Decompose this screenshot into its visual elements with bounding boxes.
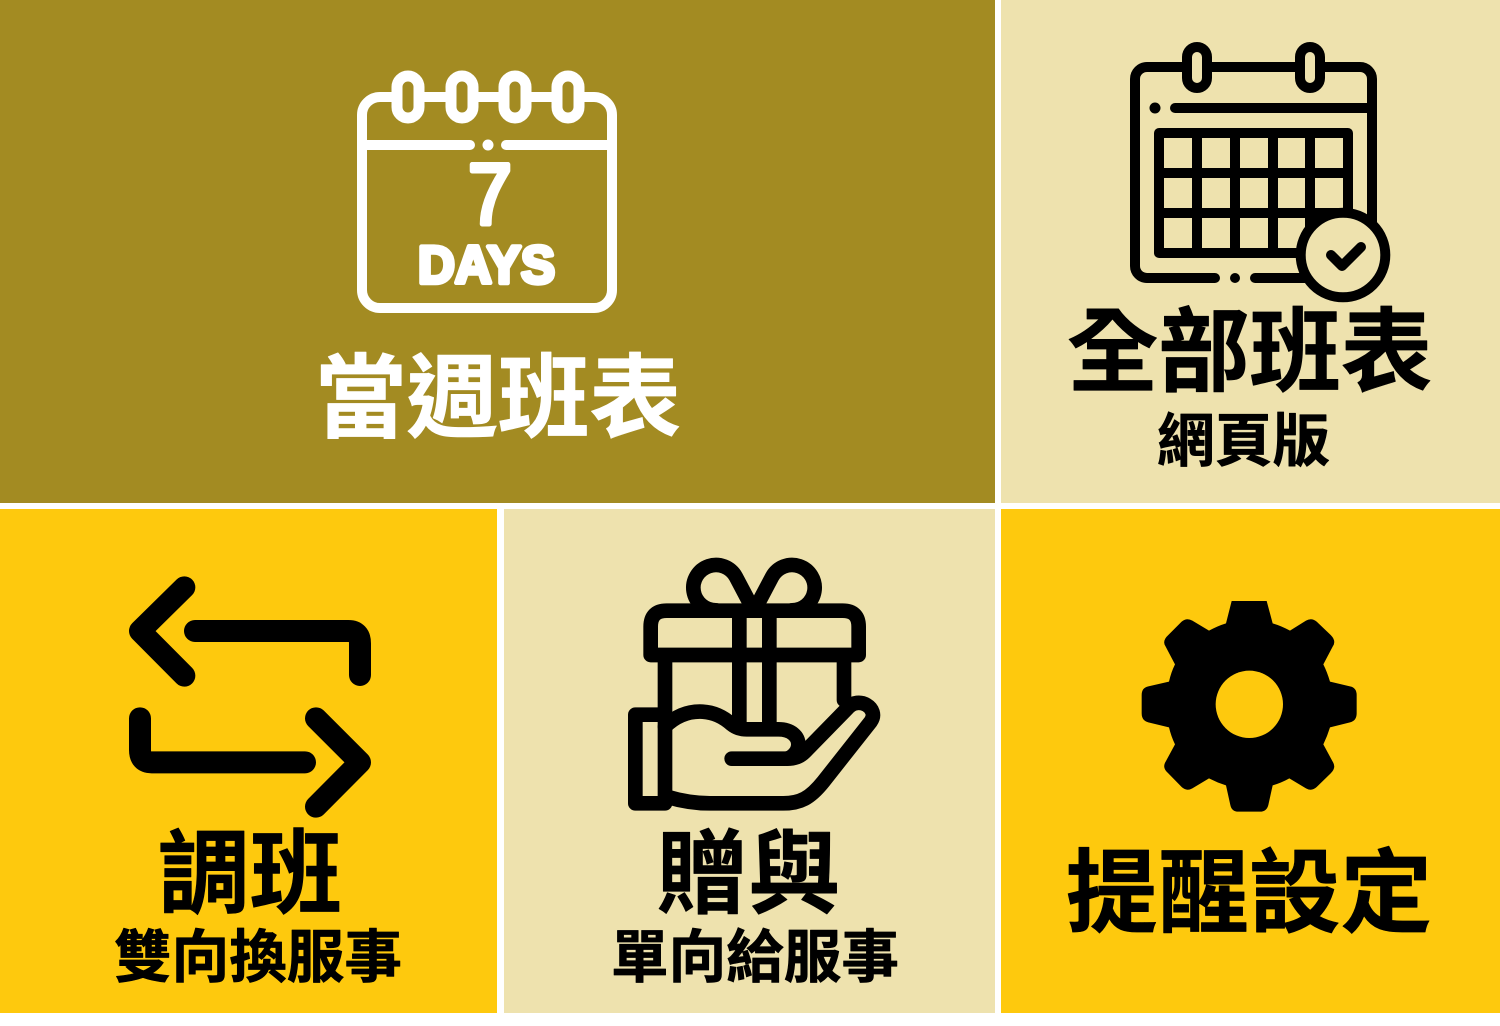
panel: give shift (504, 509, 995, 1013)
heading: reminder settings: 提醒設定 (1066, 843, 1432, 945)
icon: calendar with check (1135, 47, 1385, 297)
icon: 7 days calendar: DAYS (418, 236, 555, 295)
icon: gift on hand (635, 565, 873, 803)
heading: full schedule: 全部班表 (1067, 302, 1432, 404)
heading: swap shift: 調班 (158, 824, 342, 926)
subheading: web version: 網頁版 (1157, 410, 1330, 474)
panel: swap shift (0, 509, 497, 1013)
subheading: two-way swap service: 雙向換服事 (114, 926, 402, 990)
icon: gear (1142, 601, 1357, 812)
panel: weekly schedule (0, 0, 995, 503)
icon: 7 days calendar (362, 76, 612, 308)
panel: reminder settings (1001, 509, 1500, 1013)
heading: weekly schedule: 當週班表 (315, 348, 681, 450)
icon: two-way arrows (140, 587, 360, 807)
icon: 7 days calendar: 7 (468, 147, 512, 243)
panel: full schedule (1001, 0, 1500, 503)
heading: give: 贈與 (657, 824, 840, 926)
subheading: one-way give service: 單向給服事 (611, 926, 899, 990)
